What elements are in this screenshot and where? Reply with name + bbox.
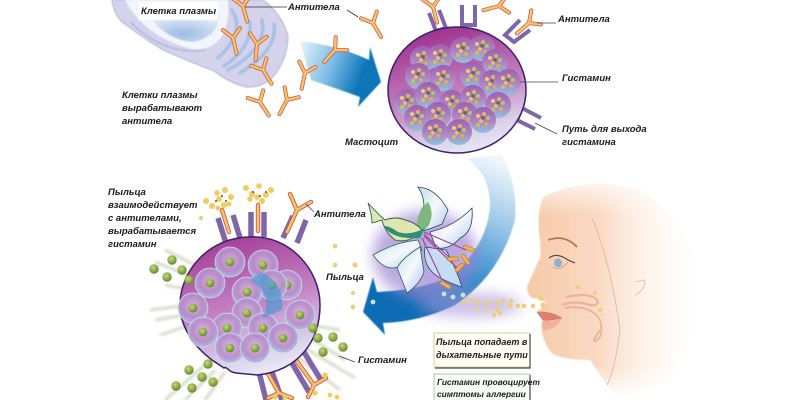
arrow: curved mast cell to pollen <box>363 155 515 335</box>
vesicles <box>178 247 315 363</box>
pollen on antibodies <box>203 183 339 400</box>
text: plasma cells produce antibodies: антитела <box>122 116 172 127</box>
pollen stream to nose <box>199 216 602 317</box>
text: pollen interacts with antibodies: гистамин <box>108 239 157 250</box>
callout: histamine causes allergy symptoms: симптомы аллергии <box>437 389 526 399</box>
icon: flower <box>368 187 477 299</box>
label: histamine exit path: гистамина <box>562 137 616 148</box>
histamine bursts <box>150 250 355 400</box>
label: plasma cell: Клетка плазмы <box>141 6 216 17</box>
callout: pollen enters airways: Пыльца попадает в <box>436 337 527 347</box>
panel: plasma cell <box>112 0 288 87</box>
cell body <box>180 237 320 375</box>
label: histamine exit path <box>535 123 647 148</box>
label: antibodies on mast cell: Антитела <box>557 14 610 25</box>
text: pollen interacts with antibodies: взаимодействует <box>108 200 198 211</box>
label: antibodies bottom: Антитела <box>313 209 366 220</box>
callout: histamine causes allergy symptoms <box>434 374 540 400</box>
label: mast cell: Мастоцит <box>345 137 399 148</box>
label: histamine bottom: Гистамин <box>358 355 407 366</box>
callout: pollen enters airways <box>434 333 530 368</box>
label: antibodies top <box>245 2 358 17</box>
callout: histamine causes allergy symptoms: Гистамин провоцирует <box>437 377 540 387</box>
label: pollen: Пыльца <box>326 272 364 283</box>
text: pollen interacts with antibodies: вырабатывается <box>108 226 196 237</box>
text: pollen interacts with antibodies: с антителами, <box>108 213 182 224</box>
panel: mast cell <box>388 0 542 153</box>
label: histamine exit path: Путь для выхода <box>562 124 647 135</box>
panel: activated mast cell <box>149 183 355 400</box>
label: histamine: Гистамин <box>562 73 611 84</box>
label: antibodies top: Антитела <box>287 2 340 13</box>
plasma antibodies <box>223 0 389 120</box>
mast cell receptors <box>429 5 541 129</box>
text: pollen interacts with antibodies: Пыльца <box>108 187 146 198</box>
face features <box>537 218 645 385</box>
text: plasma cells produce antibodies: вырабатывают <box>122 103 203 114</box>
callout: pollen enters airways: дыхательные пути <box>436 350 528 360</box>
receptors <box>218 212 322 400</box>
released histamine granules <box>149 255 348 393</box>
arrow: plasma to mast cell <box>300 41 381 107</box>
text: plasma cells produce antibodies: Клетки плазмы <box>122 90 197 101</box>
label: histamine <box>520 73 611 84</box>
histamine vesicles <box>394 35 521 145</box>
label: antibodies bottom <box>306 204 366 220</box>
panel: face <box>520 170 720 400</box>
